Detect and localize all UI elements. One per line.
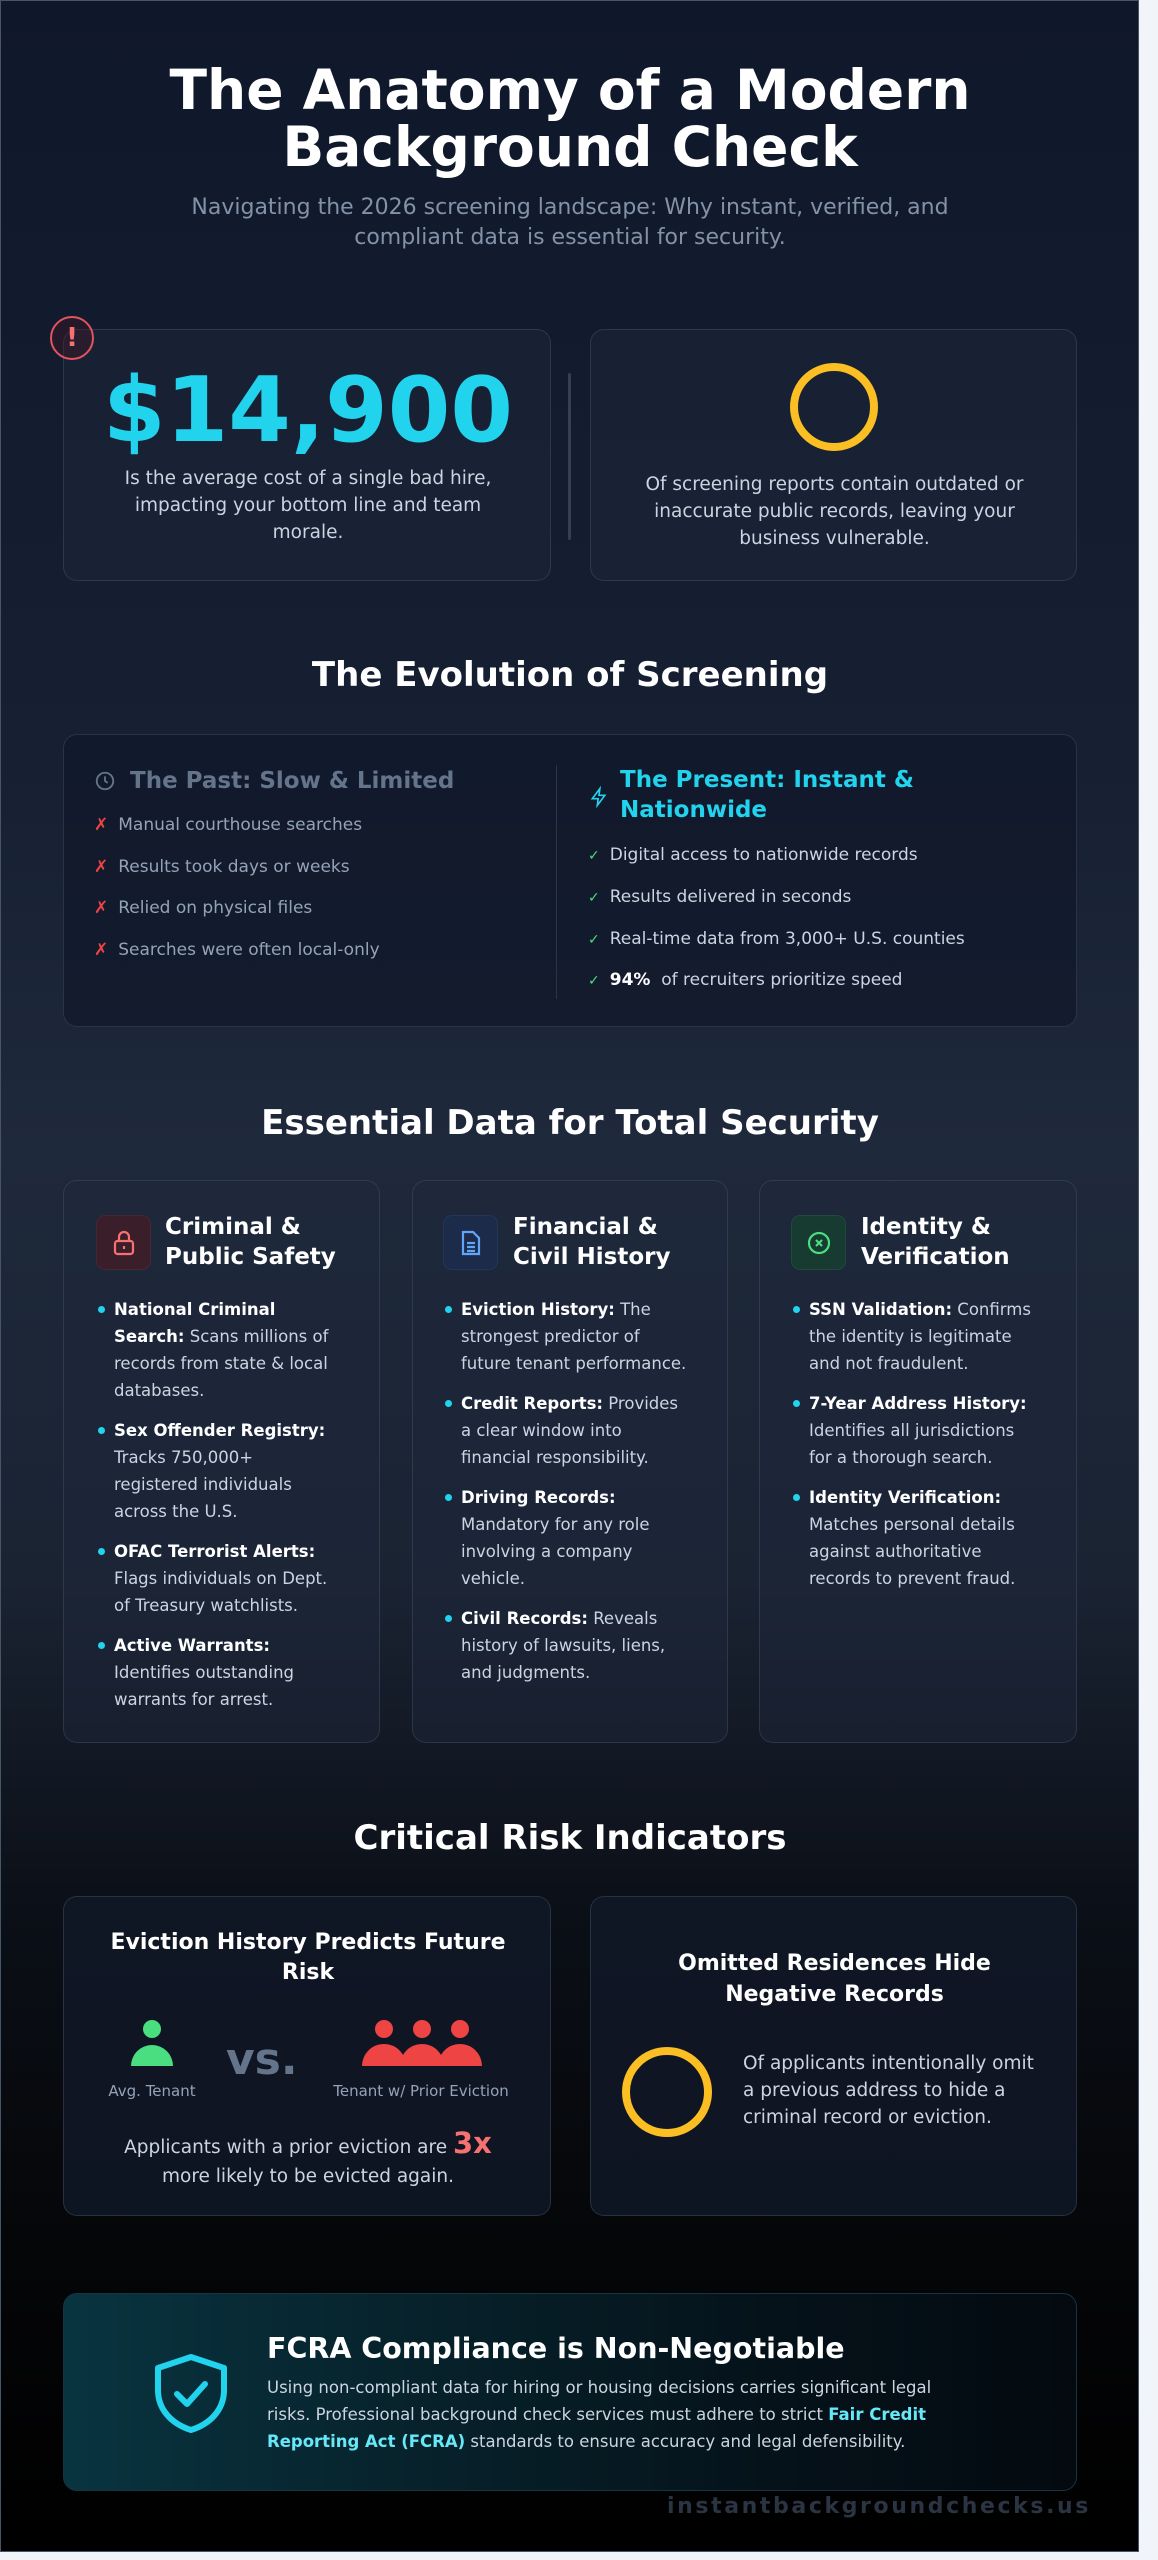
title: Background Check xyxy=(282,115,858,179)
past column: ✗ Searches were often local-only xyxy=(94,940,380,960)
FCRA body: Using non-compliant data for hiring or housing decisions carries significant legal xyxy=(267,2378,931,2397)
present heading: The Present: Instant & xyxy=(620,767,914,793)
list: Civil Records: Reveals xyxy=(461,1609,657,1628)
card heading: Verification xyxy=(861,1244,1010,1270)
list: records to prevent fraud. xyxy=(809,1569,1015,1588)
list: and not fraudulent. xyxy=(809,1354,969,1373)
statement: Applicants with a prior eviction are 3x xyxy=(124,2126,492,2160)
card heading: Omitted Residences Hide xyxy=(678,1951,991,1976)
statement: more likely to be evicted again. xyxy=(162,2166,454,2187)
subtitle: Navigating the 2026 screening landscape: Why instant, verified, and xyxy=(191,195,949,220)
list: across the U.S. xyxy=(114,1502,238,1521)
list: for a thorough search. xyxy=(809,1448,993,1467)
list: Credit Reports: Provides xyxy=(461,1394,678,1413)
list: 7-Year Address History: xyxy=(809,1394,1027,1413)
title xyxy=(170,58,970,179)
heading: essential data: Essential Data for Total Security xyxy=(261,1103,879,1143)
present column: ✓ Real-time data from 3,000+ U.S. counties xyxy=(588,929,965,949)
statement xyxy=(124,2126,492,2187)
list: the identity is legitimate xyxy=(809,1327,1012,1346)
present column: ✓ Digital access to nationwide records xyxy=(588,845,918,865)
panel: criminal xyxy=(63,1180,380,1743)
list: Identifies outstanding xyxy=(114,1663,294,1682)
panel: FCRA compliance xyxy=(63,2293,1077,2491)
stat description: business vulnerable. xyxy=(739,528,930,549)
stat description xyxy=(645,474,1024,549)
present heading: Nationwide xyxy=(620,797,767,823)
panel: eviction risk xyxy=(63,1896,551,2216)
icon: lightning xyxy=(590,786,606,808)
list: warrants for arrest. xyxy=(114,1690,273,1709)
list: Flags individuals on Dept. xyxy=(114,1569,327,1588)
subtitle xyxy=(191,195,949,250)
FCRA heading: FCRA Compliance is Non-Negotiable xyxy=(267,2332,845,2365)
list xyxy=(98,1300,329,1709)
card heading xyxy=(110,1930,506,1985)
present column: ✓ 94% of recruiters prioritize speed xyxy=(588,970,902,990)
list: Mandatory for any role xyxy=(461,1515,650,1534)
past column: ✗ Relied on physical files xyxy=(94,898,312,918)
stat description: Is the average cost of a single bad hire, xyxy=(125,468,491,489)
list: involving a company xyxy=(461,1542,632,1561)
panel: omitted residences xyxy=(590,1896,1077,2216)
card heading: Civil History xyxy=(513,1244,670,1270)
icon: lock xyxy=(96,1215,151,1270)
label prior eviction: Tenant w/ Prior Eviction xyxy=(333,2082,509,2100)
past heading: The Past: Slow & Limited xyxy=(130,768,454,794)
icon: yellow ring xyxy=(790,363,878,451)
list: Tracks 750,000+ xyxy=(114,1448,253,1467)
list: Identity Verification: xyxy=(809,1488,1001,1507)
card heading: Criminal & xyxy=(165,1214,301,1240)
list xyxy=(793,1300,1031,1588)
panel: outdated reports stat xyxy=(590,329,1077,581)
list: Matches personal details xyxy=(809,1515,1015,1534)
icon: document xyxy=(443,1215,498,1270)
description xyxy=(743,2053,1034,2128)
panel: financial xyxy=(412,1180,728,1743)
list: strongest predictor of xyxy=(461,1327,640,1346)
stat description: Of screening reports contain outdated or xyxy=(645,474,1024,495)
icon: clock xyxy=(96,772,114,790)
list: vehicle. xyxy=(461,1569,525,1588)
list: Identifies all jurisdictions xyxy=(809,1421,1014,1440)
description: criminal record or eviction. xyxy=(743,2107,992,2128)
FCRA body: Reporting Act (FCRA) standards to ensure accuracy and legal defensibility. xyxy=(267,2432,905,2451)
card heading: Identity & xyxy=(861,1214,991,1240)
vs text: vs. xyxy=(226,2034,298,2085)
card heading xyxy=(165,1214,336,1270)
icon: verify circle xyxy=(791,1215,846,1270)
list: history of lawsuits, liens, xyxy=(461,1636,665,1655)
present column xyxy=(588,767,965,990)
present heading xyxy=(620,767,914,823)
panel: bad hire cost stat xyxy=(63,329,551,581)
card heading: Eviction History Predicts Future xyxy=(110,1930,506,1955)
list xyxy=(445,1300,686,1682)
present column: ✓ Results delivered in seconds xyxy=(588,887,851,907)
list: a clear window into xyxy=(461,1421,622,1440)
list: financial responsibility. xyxy=(461,1448,649,1467)
divider xyxy=(568,373,571,540)
title: The Anatomy of a Modern xyxy=(170,58,970,122)
stat description: inaccurate public records, leaving your xyxy=(654,501,1015,522)
icon: avg tenant xyxy=(131,2020,173,2066)
list: databases. xyxy=(114,1381,204,1400)
FCRA body: risks. Professional background check services must adhere to strict Fair Credit xyxy=(267,2405,926,2424)
card heading: Risk xyxy=(282,1960,334,1985)
description: Of applicants intentionally omit xyxy=(743,2053,1034,2074)
list: SSN Validation: Confirms xyxy=(809,1300,1031,1319)
icon: alert xyxy=(50,316,94,360)
list: Sex Offender Registry: xyxy=(114,1421,325,1440)
description: a previous address to hide a xyxy=(743,2080,1005,2101)
label avg: Avg. Tenant xyxy=(108,2082,196,2100)
list: records from state & local xyxy=(114,1354,328,1373)
stat description: morale. xyxy=(273,522,343,543)
past column: ✗ Results took days or weeks xyxy=(94,857,350,877)
list: registered individuals xyxy=(114,1475,292,1494)
FCRA body xyxy=(267,2378,931,2451)
subtitle: compliant data is essential for security. xyxy=(354,225,786,250)
list: of Treasury watchlists. xyxy=(114,1596,298,1615)
card heading: Financial & xyxy=(513,1214,658,1240)
past column xyxy=(94,768,454,960)
list: Search: Scans millions of xyxy=(114,1327,328,1346)
list: against authoritative xyxy=(809,1542,982,1561)
list: National Criminal xyxy=(114,1300,275,1319)
card heading xyxy=(678,1951,991,2007)
heading: risk indicators: Critical Risk Indicators xyxy=(354,1818,786,1858)
list: future tenant performance. xyxy=(461,1354,686,1373)
icon: evicted tenants group xyxy=(362,2020,482,2066)
card heading: Public Safety xyxy=(165,1244,336,1270)
icon: alert: ! xyxy=(66,323,78,353)
stat description: impacting your bottom line and team xyxy=(135,495,481,516)
list: Driving Records: xyxy=(461,1488,616,1507)
list: OFAC Terrorist Alerts: xyxy=(114,1542,315,1561)
icon: yellow ring xyxy=(622,2047,712,2137)
heading: evolution: The Evolution of Screening xyxy=(312,655,828,695)
card heading: Negative Records xyxy=(725,1982,944,2007)
card heading xyxy=(861,1214,1010,1270)
past column: ✗ Manual courthouse searches xyxy=(94,815,362,835)
footer: website: instantbackgroundchecks.us xyxy=(667,2494,1091,2519)
panel: identity xyxy=(759,1180,1077,1743)
big number: $14,900 xyxy=(103,358,513,463)
icon: shield xyxy=(155,2354,227,2433)
list: and judgments. xyxy=(461,1663,590,1682)
panel: evolution xyxy=(63,734,1077,1027)
card heading xyxy=(513,1214,670,1270)
list: Eviction History: The xyxy=(461,1300,651,1319)
stat description xyxy=(125,468,491,543)
list: Active Warrants: xyxy=(114,1636,270,1655)
